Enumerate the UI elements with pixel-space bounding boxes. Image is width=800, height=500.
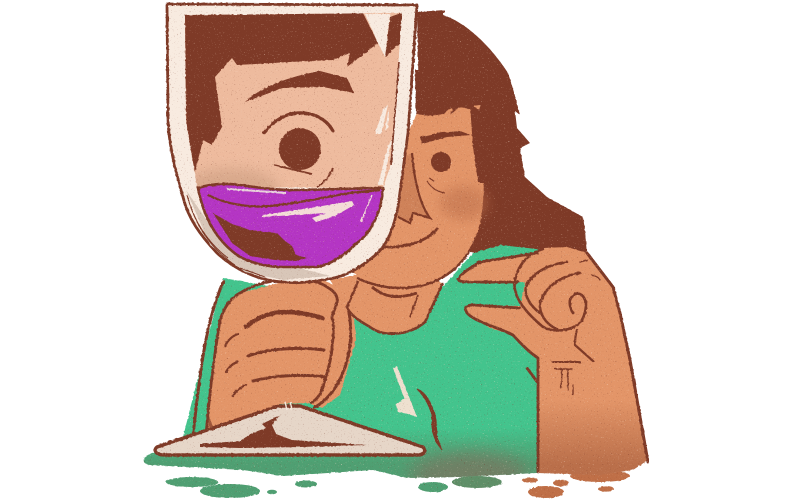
left arm outline xyxy=(193,280,224,436)
lower-face shading xyxy=(195,166,280,188)
right hand and arm xyxy=(458,247,648,475)
shirt shadow xyxy=(406,443,534,478)
wine glass bowl xyxy=(167,4,417,283)
fringe xyxy=(415,70,478,116)
holding hand xyxy=(207,280,337,432)
wine xyxy=(198,184,383,267)
curled fingers xyxy=(515,249,586,330)
eye and brow xyxy=(431,152,451,172)
face seen through glass xyxy=(185,13,402,188)
shirt wrinkle highlight xyxy=(393,366,417,417)
glass brow xyxy=(245,71,354,102)
puddles xyxy=(166,476,502,498)
base shadow xyxy=(200,415,367,448)
illustration: person peering through a wine glass xyxy=(144,2,650,498)
wine glass base xyxy=(155,406,425,455)
shirt wrinkle xyxy=(417,389,442,450)
wine surface line xyxy=(208,190,380,207)
neck and chin xyxy=(330,262,443,334)
face xyxy=(350,105,485,288)
shirt xyxy=(144,244,539,478)
glass eye arc xyxy=(264,113,333,133)
wine shadow xyxy=(213,213,307,261)
orange puddles xyxy=(522,470,630,498)
nose xyxy=(398,153,430,223)
hair xyxy=(417,10,587,262)
glass glare xyxy=(365,14,390,57)
wine highlights xyxy=(262,201,354,222)
glass lower tint xyxy=(186,190,330,280)
glass hair xyxy=(182,13,378,172)
cheek shadow xyxy=(440,186,488,220)
hand shadow xyxy=(207,410,225,437)
smile xyxy=(382,228,438,247)
forearm behind hand xyxy=(300,278,356,408)
glass pupil xyxy=(279,128,321,170)
